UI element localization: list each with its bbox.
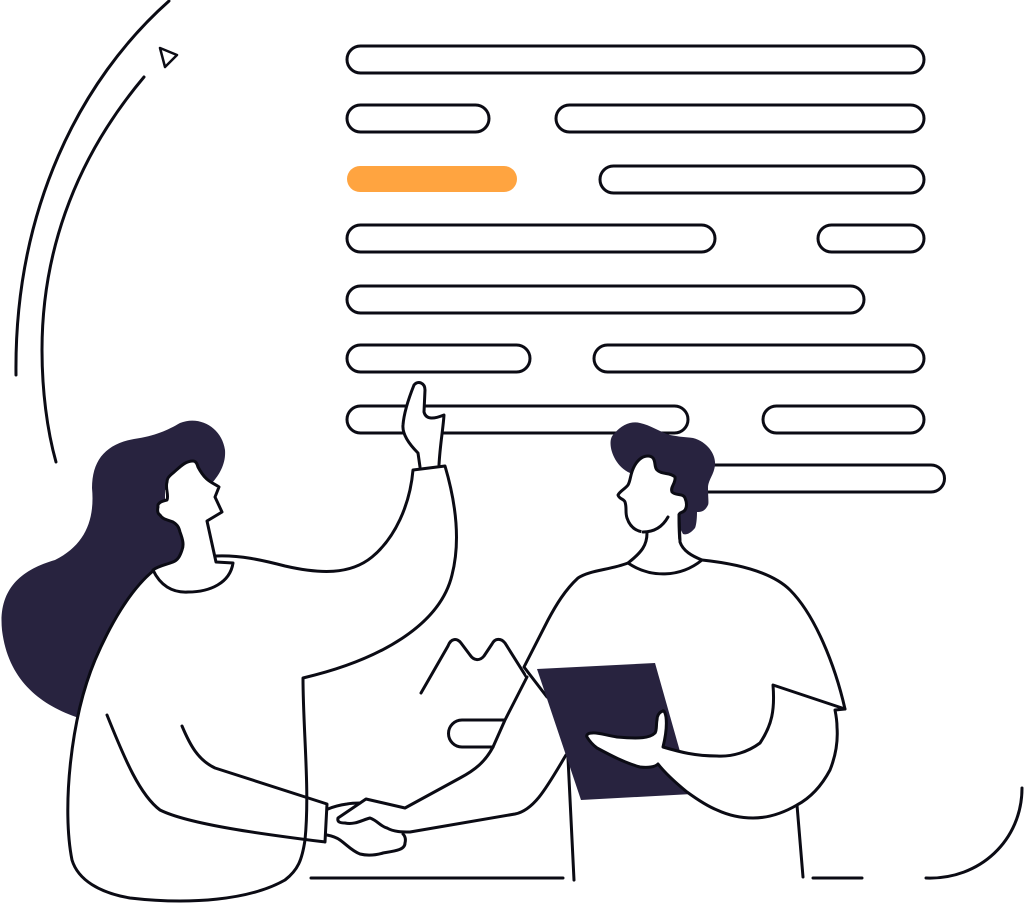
ground lines <box>311 788 1022 878</box>
woman raised hand <box>403 383 444 467</box>
man shoulders and left arm <box>338 563 628 832</box>
man's hair <box>611 422 715 534</box>
man neck and collar <box>628 515 702 574</box>
man right torso and sleeve <box>702 560 845 709</box>
handshake lower hand <box>327 803 405 855</box>
woman's hair <box>2 421 225 718</box>
man forearm and hand <box>587 685 845 818</box>
woman figure <box>68 383 456 901</box>
text line pills <box>347 46 945 492</box>
background mountain and small pill <box>421 639 527 747</box>
woman body <box>68 466 456 901</box>
man figure <box>338 456 845 880</box>
man head <box>618 456 686 542</box>
woman arm lines <box>107 715 327 842</box>
man torso fill <box>493 560 845 878</box>
decorative arc with triangle <box>16 1 177 462</box>
woman head and neck <box>153 461 233 592</box>
clipboard <box>537 663 692 800</box>
